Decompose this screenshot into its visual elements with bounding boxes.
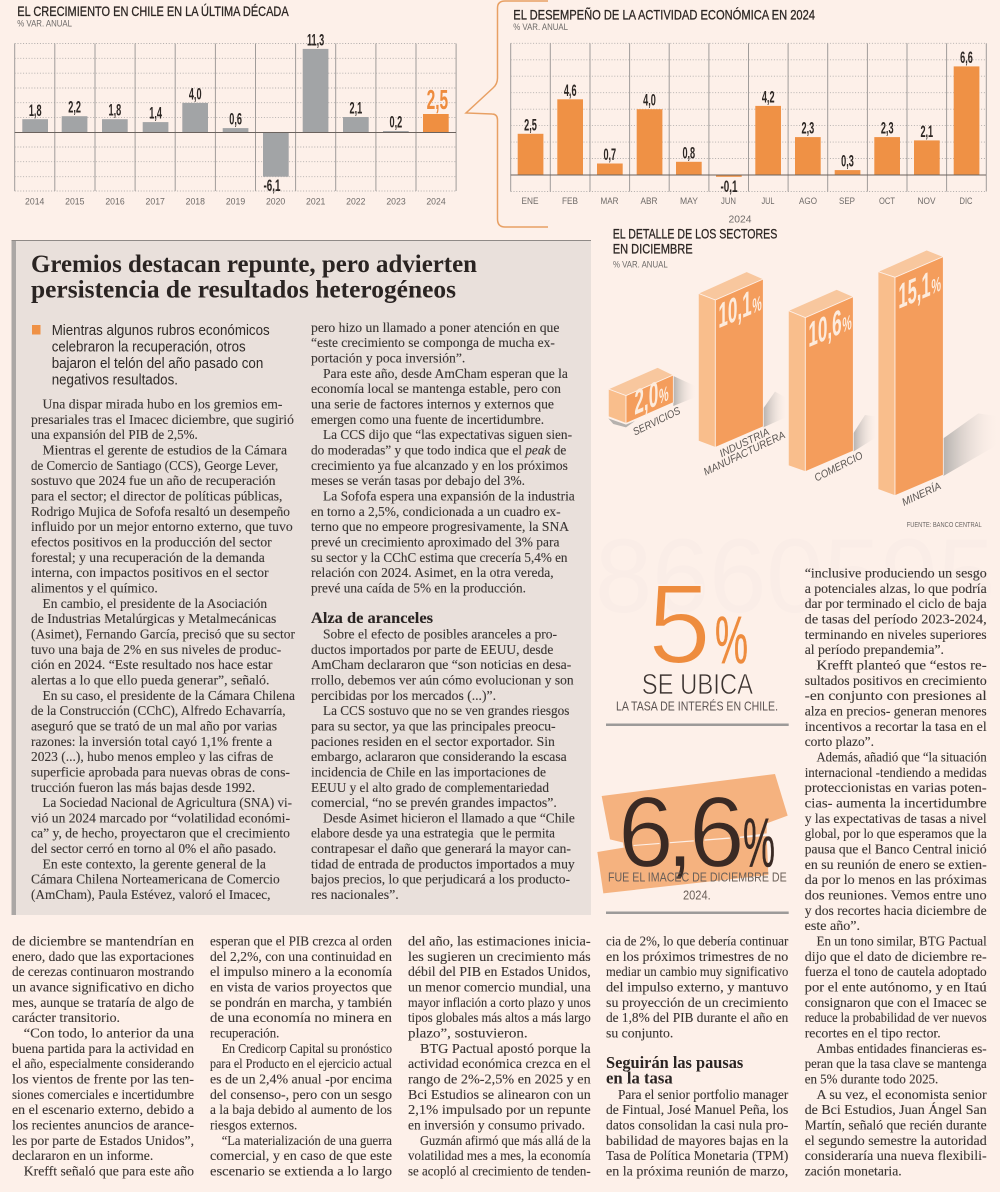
value labels: 2,5: [524, 116, 537, 134]
value labels: 6,6: [960, 49, 973, 67]
year axis labels: 2021: [306, 196, 325, 207]
article column 7: y dos recortes hacia diciembre de: [805, 904, 987, 919]
article column 2: emergen como una fuente de incertidumbre.: [311, 413, 544, 428]
article column 1: En su caso, el presidente de la Cámara Chilena: [42, 689, 296, 704]
panel: main article: [12, 240, 591, 915]
article column 4: riesgos externos.: [210, 1118, 297, 1134]
article column 6: datos consolidan la casi nula pro-: [606, 1118, 789, 1134]
article column 1: trucción fueron las más bajas desde 1992.: [31, 781, 255, 796]
article column 5: tipos globales más altos a más largo: [408, 1011, 591, 1026]
article column 6: su conjunto.: [606, 1026, 673, 1042]
article column 4: esperan que el PIB crezca al orden: [210, 934, 392, 950]
article column 1: Una dispar mirada hubo en los gremios em-: [42, 398, 283, 412]
article column 5: se acopló al crecimiento de tenden-: [408, 1164, 591, 1180]
article column 1: tuvo una baja de 2% en sus niveles de produc-: [31, 643, 282, 658]
month axis labels: ABR: [640, 196, 658, 207]
article column 7: de tasas del período 2023-2024,: [805, 613, 987, 628]
article column 1: superficie aprobada para nuevas obras de cons-: [31, 765, 290, 780]
value labels: 2,1: [350, 100, 362, 118]
article column 6: su proyección de un crecimiento: [606, 996, 788, 1011]
article column 5: plazo”, sostuvieron.: [408, 1026, 528, 1042]
chart: sector detail in December: [608, 225, 1000, 529]
value labels: 4,0: [643, 92, 656, 110]
article column 3: mes, aunque se trataría de algo de: [12, 996, 194, 1011]
article column 7: en su reunión de enero se extien-: [805, 858, 987, 873]
value labels: 4,0: [189, 85, 202, 103]
article column 6: cia de 2%, lo que debería continuar: [606, 934, 789, 950]
article column 2: EEUU y el alto grado de complementariedad: [311, 781, 549, 796]
bar: industria: [698, 272, 763, 447]
article column 7: consideraría una nueva flexibili-: [805, 1149, 987, 1164]
headline: [31, 251, 477, 304]
article column 1: alertas a lo que ello pueda generar”, señaló.: [31, 673, 269, 688]
article column 7: En un tono similar, BTG Pactual: [816, 934, 987, 950]
article column 7: fuerza el tono de cautela adoptado: [805, 965, 987, 980]
article column 7: de Bci Estudios, Juan Ángel San: [805, 1101, 987, 1118]
article column 1: razones: la inversión total cayó 1,1% frente a: [31, 735, 273, 750]
value labels: 2,5: [427, 84, 448, 115]
article column 1: [31, 398, 296, 903]
article column 2: comercial, “no se prevén grandes impactos”.: [311, 796, 557, 811]
article column 7: da por lo menos en las próximas: [805, 873, 987, 888]
article column 1: influido por un mejor entorno externo, que tuvo: [31, 520, 293, 535]
chart: monthly economic activity 2024: [511, 6, 986, 226]
bar: mineria: [878, 250, 943, 496]
year label: 2024: [728, 214, 752, 226]
article column 2: do moderadas” y que todo indica que el peak de: [311, 444, 566, 458]
month axis labels: [522, 196, 973, 207]
sector labels: SERVICIOS: [631, 405, 682, 438]
article column 7: cias- aumenta la incertidumbre: [805, 796, 987, 812]
month axis labels: OCT: [879, 196, 895, 207]
chart title: EN DICIEMBRE: [613, 240, 693, 256]
article column 7: sultados positivos en crecimiento: [805, 674, 987, 689]
month axis labels: MAY: [680, 196, 699, 207]
article column 4: [210, 934, 393, 1180]
month axis labels: JUN: [721, 196, 736, 207]
month axis labels: NOV: [918, 196, 936, 207]
big number: 5: [648, 561, 711, 687]
article column 4: es de un 2,4% anual -por encima: [210, 1072, 393, 1088]
article column 5: en inversión y consumo privado.: [408, 1118, 585, 1134]
sector labels: MINERÍA: [900, 479, 943, 509]
article column 1: En cambio, el presidente de la Asociación: [42, 597, 267, 612]
article column 7: corto plazo”.: [805, 735, 874, 750]
article column 3: siones comerciales e incertidumbre: [12, 1088, 194, 1103]
value labels: [29, 31, 448, 195]
article column 4: de una economía no minera en: [210, 1011, 392, 1026]
year axis labels: 2017: [146, 196, 165, 207]
year axis labels: 2014: [25, 196, 44, 207]
article column 5: Bci Estudios se alinearon con un: [408, 1088, 591, 1103]
article column 5: BTG Pactual apostó porque la: [420, 1042, 591, 1057]
article column 3: declararon en un informe.: [12, 1149, 153, 1164]
article column 6: babilidad de mayores bajas en la: [606, 1134, 789, 1149]
article column 6: del impulso externo, y mantuvo: [606, 980, 788, 996]
gridlines: [511, 43, 986, 191]
value labels: 0,7: [603, 146, 616, 164]
article column 1: efectos positivos en la producción del sector: [31, 536, 272, 550]
subheading: Seguirán las pausas en la tasa: [606, 1053, 744, 1088]
value labels: 2,3: [802, 120, 814, 138]
article column 2: embargo, aclararon que considerando la escasa: [311, 750, 567, 765]
article column 3: los vientos de frente por las ten-: [12, 1072, 194, 1088]
article column 2: paciones residen en el sector exportador. Sin: [311, 735, 555, 750]
article column 2: AmCham declararon que “son noticias en desa-: [311, 658, 572, 673]
article column 6: en los próximos trimestres de no: [606, 950, 788, 965]
value labels: 4,6: [564, 82, 577, 100]
article column 7: a potenciales alzas, lo que podría: [805, 582, 987, 597]
lead paragraph: Mientras algunos rubros económicos: [52, 322, 270, 339]
article column 3: los recientes anuncios de arance-: [12, 1118, 194, 1134]
value labels: -0,1: [720, 178, 738, 196]
article column 2: portación y poca inversión”.: [311, 352, 465, 366]
article column 1: ción en 2024. “Este resultado nos hace estar: [31, 658, 273, 673]
article column 4: a la baja debido al aumento de los: [210, 1103, 392, 1118]
article column 5: mayor inflación a corto plazo y unos: [408, 996, 591, 1011]
stat caption: LA TASA DE INTERÉS EN CHILE.: [616, 699, 778, 714]
year axis labels: 2020: [266, 196, 285, 207]
divider: [606, 724, 789, 726]
article column 7: alza en precios- generan menores: [805, 705, 987, 720]
month axis labels: ENE: [522, 196, 538, 207]
article column 3: el año, especialmente considerando: [12, 1057, 194, 1072]
article column 7: proteccionistas en varias poten-: [805, 781, 987, 796]
bars: [518, 66, 979, 177]
lead bullet: [32, 325, 40, 334]
article column 4: el impulso minero a la economía: [210, 965, 393, 980]
subheading: Alza de aranceles: Alza de aranceles: [311, 610, 433, 627]
article column 5: volatilidad mes a mes, la economía: [408, 1149, 591, 1164]
article column 2: La CCS sostuvo que no se ven grandes riesgos: [323, 704, 569, 719]
article column 3: les por parte de Estados Unidos”,: [12, 1134, 194, 1149]
article column 2: rrollo, debemos ver aún cómo evolucionan y son: [311, 673, 574, 688]
month axis labels: JUL: [762, 196, 774, 207]
article column 6: en la próxima reunión de marzo,: [606, 1164, 788, 1180]
article column 7: y las expectativas de tasas a nivel: [805, 812, 987, 827]
article column 7: Martín, señaló que recién durante: [805, 1118, 987, 1134]
article column 2: Para este año, desde AmCham esperan que la: [323, 367, 569, 382]
article column 2: pero hizo un llamado a poner atención en que: [311, 321, 559, 336]
value labels: 4,2: [762, 88, 775, 106]
article column 6: Para el senior portfolio manager: [618, 1088, 789, 1103]
month axis labels: FEB: [562, 196, 578, 207]
article column 2: La Sofofa espera una expansión de la industria: [323, 490, 576, 504]
article column 7: internacional -tendiendo a medidas: [805, 766, 987, 781]
article column 5: actividad económica crezca en el: [408, 1057, 591, 1072]
stat heading: SE UBICA: [642, 669, 754, 701]
article column 3: Krefft señaló que para este año: [24, 1164, 194, 1180]
article column 2: ductos importados por parte de EEUU, desde: [311, 643, 553, 658]
article column 5: rango de 2%-2,5% en 2025 y en: [408, 1072, 591, 1088]
3D bars: [608, 250, 1000, 509]
lead paragraph: [52, 322, 270, 388]
value labels: 1,8: [29, 102, 42, 120]
article column 4: del 2,2%, con una continuidad en: [210, 950, 392, 965]
year axis labels: 2024: [426, 196, 446, 207]
value labels: 1,4: [149, 105, 162, 123]
chart title: EL DETALLE DE LOS SECTORES: [613, 225, 777, 241]
article column 2: Sobre el efecto de posibles aranceles a pro-: [323, 628, 557, 642]
article column 5: débil del PIB en Estados Unidos,: [408, 965, 591, 980]
article column 2: res nacionales”.: [311, 888, 399, 903]
chart subtitle: % VAR. ANUAL: [513, 22, 568, 32]
lead paragraph: negativos resultados.: [52, 372, 178, 388]
chart subtitle: % VAR. ANUAL: [613, 259, 668, 269]
divider: [606, 912, 789, 914]
stat: 6.6% Imacec: [597, 774, 788, 902]
panel background: [12, 240, 591, 915]
article column 7: “inclusive produciendo un sesgo: [805, 567, 987, 582]
article column 4: se pondrán en marcha, y también: [210, 996, 392, 1011]
month axis labels: SEP: [839, 196, 855, 207]
article column 2: La CCS dijo que “las expectativas siguen sien-: [323, 428, 572, 443]
article column 4: escenario se extienda a lo largo: [210, 1164, 392, 1180]
article column 7: dijo que el dato de diciembre re-: [805, 950, 987, 965]
chart title: [613, 225, 777, 256]
article column 7: terminando en niveles superiores: [805, 628, 987, 643]
article column 3: enero, dado que las exportaciones: [12, 950, 194, 965]
year axis labels: 2016: [105, 196, 125, 207]
article column 7: dar por terminado el ciclo de baja: [805, 597, 987, 612]
article column 2: incidencia de Chile en las importaciones de: [311, 765, 546, 780]
article column 7: [805, 567, 987, 1180]
article column 2: Desde Asimet hicieron el llamado a que “Chile: [323, 811, 575, 826]
article column 3: “Con todo, lo anterior da una: [24, 1026, 195, 1042]
article column 7: zación monetaria.: [805, 1164, 902, 1180]
article column 5: 2,1% impulsado por un repunte: [408, 1103, 591, 1118]
sector labels: COMERCIO: [813, 450, 865, 484]
article column 1: interna, con impactos positivos en el sector: [31, 566, 269, 581]
article column 5: les sugieren un crecimiento más: [408, 950, 591, 965]
orange brush background: [597, 774, 788, 893]
month axis labels: AGO: [799, 196, 817, 207]
value labels: 2,3: [881, 120, 894, 138]
article column 7: -en conjunto con presiones al: [805, 689, 987, 704]
article column 1: forestal; y una recuperación de la demanda: [31, 551, 266, 566]
month axis labels: DIC: [960, 196, 973, 207]
article column 4: del consenso-, pero con un sesgo: [210, 1088, 392, 1103]
article column 3: de diciembre se mantendrían en: [12, 934, 194, 950]
chart subtitle: % VAR. ANUAL: [17, 19, 72, 29]
article column 1: alimentos y el químico.: [31, 582, 158, 596]
article column 2: contrapesar el daño que generará la mayor can-: [311, 842, 571, 857]
value labels: 0,3: [841, 153, 854, 171]
article column 7: por el ente autónomo, y en Itaú: [805, 980, 987, 996]
article column 7: recortes en el tipo rector.: [805, 1026, 941, 1042]
article column 1: ca” y, de hecho, proyectaron que el crecimiento: [31, 827, 290, 842]
sector labels: INDUSTRIA: [718, 426, 771, 460]
percent labels: %: [659, 381, 669, 409]
percent sign: %: [743, 804, 775, 882]
chart: growth in Chile last decade: [15, 3, 456, 207]
article column 2: relación con 2024. Asimet, en la otra vereda,: [311, 566, 554, 581]
article column 6: Tasa de Política Monetaria (TPM): [606, 1149, 789, 1164]
article column 5: un menor comercio mundial, una: [408, 980, 591, 996]
article column 7: global, por lo que esperamos que la: [805, 827, 987, 842]
article column 2: tidad de entrada de productos importados a muy: [311, 857, 575, 872]
article column 1: (Asimet), Fernando García, precisó que su sector: [31, 628, 295, 642]
month axis labels: MAR: [600, 196, 619, 207]
article column 2: en torno a 2,5%, condicionada a un cuadro ex-: [311, 505, 561, 520]
article column 2: para su sector, ya que las principales preocu-: [311, 719, 556, 734]
value labels: [524, 49, 973, 196]
gridlines: [15, 44, 456, 191]
article column 1: una expansión del PIB de 2,5%.: [31, 428, 198, 443]
article column 7: peran que la tasa clave se mantenga: [805, 1057, 987, 1072]
bars: [22, 49, 449, 177]
stat caption: 2024.: [683, 888, 711, 902]
chart title: EL CRECIMIENTO EN CHILE EN LA ÚLTIMA DÉCADA: [17, 3, 289, 19]
article column 2: percibidas por los mercados (...)”.: [311, 689, 496, 704]
article column 2: meses se verán tasas por debajo del 3%.: [311, 474, 525, 489]
bar: servicios: [608, 367, 673, 423]
percent labels: %: [752, 291, 762, 318]
percent labels: 2,0: [634, 373, 658, 423]
article column 1: presariales tras el Imacec diciembre, que sugirió: [31, 413, 294, 428]
article column 1: 2023 (...), hubo menos empleo y las cifras de: [31, 750, 273, 765]
percent labels: [634, 264, 941, 423]
article column 2: prevé una caída de 5% en la producción.: [311, 582, 526, 596]
article column 1: para el sector; el director de políticas públicas,: [31, 490, 282, 504]
article column 3: buena partida para la actividad en: [12, 1042, 194, 1057]
article column 7: dos reuniones. Vemos entre uno: [805, 888, 987, 904]
article column 2: [311, 321, 576, 903]
article column 7: este año”.: [805, 919, 860, 934]
percent sign: %: [715, 603, 748, 678]
article column 5: [408, 934, 591, 1180]
lead paragraph: bajaron el telón del año pasado con: [52, 355, 263, 372]
article column 7: A su vez, el economista senior: [816, 1088, 987, 1103]
article column 7: consignaron que con el Imacec se: [805, 996, 987, 1011]
article column 6: mediar un cambio muy significativo: [606, 965, 788, 980]
article column 1: Mientras el gerente de estudios de la Cámara: [42, 444, 288, 458]
article column 2: bajos precios, lo que perjudicará a los producto-: [311, 873, 570, 888]
value labels: 0,8: [682, 144, 695, 162]
percent labels: 10,1: [718, 282, 752, 336]
article column 1: de Comercio de Santiago (CCS), George Lever,: [31, 459, 278, 474]
value labels: 0,2: [390, 114, 402, 132]
article column 2: terno que no empeore progresivamente, la SNA: [311, 520, 570, 535]
article column 4: “La materialización de una guerra: [222, 1134, 393, 1149]
bar: comercio: [788, 289, 853, 472]
percent labels: 10,6: [808, 301, 842, 355]
article column 7: Krefft planteó que “estos re-: [816, 659, 987, 674]
article column 1: Rodrigo Mujica de Sofofa resaltó un desempeño: [31, 505, 290, 520]
article column 4: recuperación.: [210, 1026, 279, 1042]
article column 1: vió un 2024 marcado por “volatilidad económi-: [31, 811, 290, 826]
article column 1: Cámara Chilena Norteamericana de Comercio: [31, 873, 280, 888]
chart title: EL DESEMPEÑO DE LA ACTIVIDAD ECONÓMICA EN 2024: [513, 6, 815, 22]
article column 2: prevé un crecimiento aproximado del 3% para: [311, 536, 560, 550]
article column 2: su sector y la CChC estima que crecería 5,4% en: [311, 551, 568, 566]
background watermark: 8660595: [595, 518, 995, 635]
percent labels: %: [931, 271, 941, 299]
article column 4: comercial, y en caso de que este: [210, 1149, 392, 1164]
year axis labels: 2023: [386, 196, 406, 207]
article column 2: elabore desde ya una estrategia que le permita: [311, 827, 556, 842]
year axis labels: [25, 196, 446, 207]
value labels: 0,6: [229, 111, 242, 129]
article column 1: del sector cerró en torno al 0% el año pasado.: [31, 842, 276, 857]
big number: 6,6: [618, 777, 745, 889]
article column 6: [606, 934, 789, 1180]
article column 2: una serie de factores internos y externos que: [311, 398, 554, 412]
shadows: [608, 376, 1000, 476]
article column 1: La Sociedad Nacional de Agricultura (SNA) vi-: [42, 796, 292, 811]
subheading: Seguirán las pausas en la tasa: en la tasa: [606, 1068, 673, 1088]
article column 3: en el escenario externo, debido a: [12, 1103, 195, 1118]
article column 3: de cerezas continuaron mostrando: [12, 965, 194, 980]
headline: persistencia de resultados heterogéneos: [31, 277, 456, 304]
article column 7: Además, añadió que “la situación: [816, 750, 987, 766]
article column 1: (AmCham), Paula Estévez, valoró el Imacec,: [31, 888, 270, 903]
subheading: Seguirán las pausas en la tasa: Seguirán las pausas: [606, 1053, 744, 1072]
percent labels: %: [842, 310, 852, 337]
article column 6: de 1,8% del PIB durante el año en: [606, 1011, 788, 1026]
value labels: 2,1: [920, 123, 933, 141]
stat: 5% interest rate: [616, 561, 778, 714]
year axis labels: 2018: [186, 196, 205, 207]
article column 7: en 5% durante todo 2025.: [805, 1072, 938, 1088]
article column 4: En Credicorp Capital su pronóstico: [222, 1042, 392, 1057]
article column 4: para el Producto en el ejercicio actual: [210, 1057, 392, 1072]
article column 3: carácter transitorio.: [12, 1011, 120, 1026]
article column 1: En este contexto, la gerente general de la: [42, 857, 267, 872]
stat caption: FUE EL IMACEC DE DICIEMBRE DE: [608, 871, 787, 885]
year axis labels: 2015: [65, 196, 84, 207]
article column 3: [12, 934, 195, 1180]
article column 4: en vista de varios proyectos que: [210, 980, 392, 996]
article column 5: Guzmán afirmó que más allá de la: [420, 1134, 591, 1149]
stat caption: [608, 871, 787, 902]
value labels: 2,2: [68, 99, 81, 117]
headline: Gremios destacan repunte, pero advierten: [31, 251, 477, 278]
article column 2: crecimiento ya fue alcanzado y en los próximos: [311, 459, 568, 474]
value labels: -6,1: [264, 177, 280, 195]
article column 1: de la Construcción (CChC), Alfredo Echavarría,: [31, 704, 286, 719]
article column 7: al período prepandemia”.: [805, 643, 944, 658]
sector labels: [631, 405, 943, 509]
callout bracket linking 2024 to monthly chart: [466, 1, 548, 227]
article column 6: de Fintual, José Manuel Peña, los: [606, 1103, 788, 1118]
article column 7: Ambas entidades financieras es-: [816, 1042, 987, 1057]
article column 1: sostuvo que 2024 fue un año de recuperación: [31, 474, 276, 489]
article column 1: de Industrias Metalúrgicas y Metalmecánicas: [31, 612, 276, 627]
value labels: 1,8: [109, 102, 121, 120]
value labels: 11,3: [307, 31, 324, 49]
article column 2: “este crecimiento se componga de mucha ex-: [311, 336, 555, 351]
sector labels: MANUFACTURERA: [702, 429, 787, 478]
year axis labels: 2022: [346, 196, 365, 207]
article column 7: pausa que el Banco Central inició: [805, 842, 987, 858]
article column 7: el segundo semestre la autoridad: [805, 1134, 987, 1149]
percent labels: 15,1: [898, 264, 931, 317]
article column 3: un avance significativo en dicho: [12, 980, 194, 996]
year axis labels: 2019: [226, 196, 245, 207]
article column 7: incentivos a recortar la tasa en el: [805, 720, 987, 735]
article column 2: economía local se mantenga estable, pero con: [311, 382, 561, 397]
lead paragraph: celebraron la recuperación, otros: [52, 338, 246, 356]
article column 5: del año, las estimaciones inicia-: [408, 934, 591, 950]
article column 1: aseguró que se trató de un mal año por varias: [31, 719, 277, 734]
